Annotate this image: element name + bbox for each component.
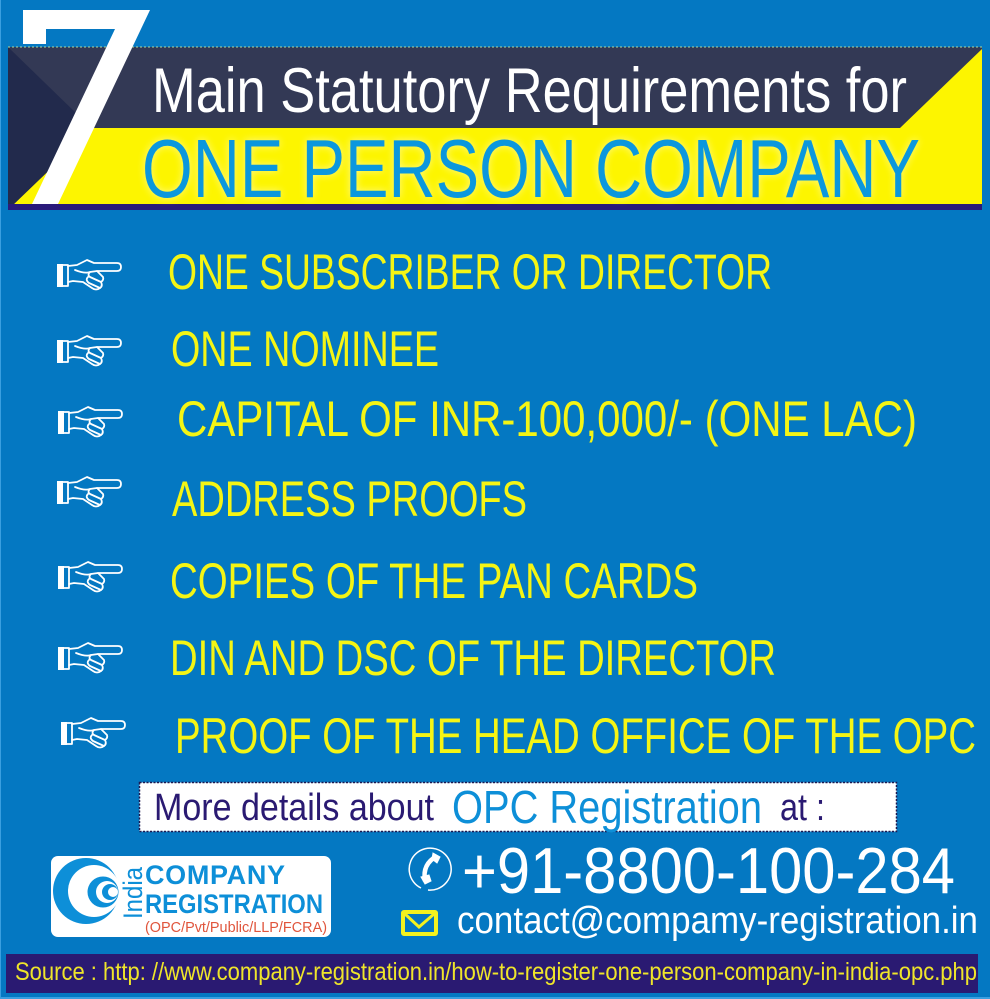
banner: purple bottom strip: [8, 204, 982, 210]
source bar: [6, 954, 978, 993]
logo text: COMPANY: COMPANY: [145, 860, 285, 890]
logo mark: concentric crescents: [53, 858, 120, 924]
icon: pointing hand 6: [58, 643, 122, 672]
icon: pointing hand 7: [61, 718, 125, 748]
callout text: OPC Registration: OPC Registration: [452, 781, 762, 833]
banner: yellow base: [8, 47, 982, 204]
source bar background: [6, 954, 978, 993]
icon: pointing hand 5: [58, 562, 122, 592]
phone number: +91-8800-100-284: [462, 834, 955, 907]
icon: pointing hand 1: [57, 260, 121, 290]
callout: more details: [140, 781, 896, 833]
icon: envelope: [403, 912, 436, 934]
callout box: [140, 782, 896, 832]
callout text: more details about: More details about: [154, 787, 434, 829]
requirements list: [168, 244, 976, 764]
logo background: [51, 856, 331, 937]
icon: pointing hand 3: [58, 407, 122, 436]
logo text: India: India: [118, 866, 148, 919]
icon: pointing hand 4: [57, 477, 121, 506]
banner: dark left triangle: [8, 47, 93, 204]
item 2: ONE NOMINEE: [171, 321, 439, 377]
icon: phone: [409, 848, 451, 890]
callout text: at: at :: [780, 787, 825, 829]
logo text: REGISTRATION: REGISTRATION: [145, 889, 323, 919]
icon: pointing hand 2: [57, 336, 121, 366]
banner: dark upper band: [8, 47, 982, 204]
header banner: [8, 10, 982, 215]
item 5: COPIES OF THE PAN CARDS: [170, 553, 698, 609]
logo text: tagline: (OPC/Pvt/Public/LLP/FCRA): [145, 919, 327, 936]
item 4: ADDRESS PROOFS: [172, 471, 527, 527]
numeral 7: [23, 10, 150, 204]
logo card: [51, 856, 331, 937]
item 6: DIN AND DSC OF THE DIRECTOR: [170, 630, 776, 686]
item 1: ONE SUBSCRIBER OR DIRECTOR: [168, 244, 772, 300]
